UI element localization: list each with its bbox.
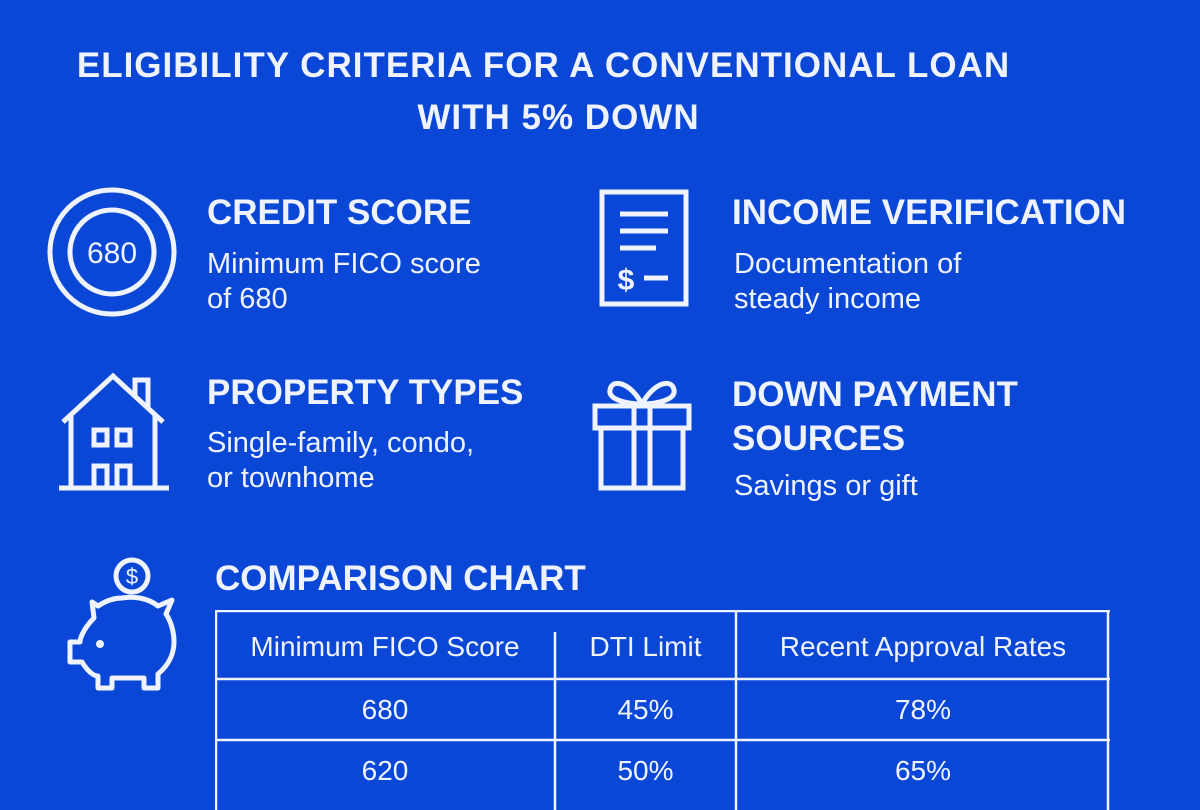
table header: DTI Limit xyxy=(590,631,702,662)
table: comparison chart xyxy=(215,610,1110,810)
text: income verification xyxy=(734,248,962,315)
title: WITH 5% DOWN xyxy=(417,98,700,137)
text: income verification: steady income xyxy=(734,283,921,315)
table row 680 xyxy=(362,694,951,725)
text: credit score xyxy=(207,248,481,315)
icon: credit score gauge: 680 xyxy=(87,237,137,270)
heading: income verification: INCOME VERIFICATION xyxy=(732,193,1126,232)
icon: piggy bank xyxy=(68,558,176,690)
icon: house xyxy=(59,372,169,490)
text: credit score: of 680 xyxy=(207,283,288,315)
table row 620: 65% xyxy=(895,755,951,786)
text: property types: or townhome xyxy=(207,462,375,494)
panel: income verification xyxy=(732,193,1126,315)
heading: property types: PROPERTY TYPES xyxy=(207,373,523,412)
panel: credit score xyxy=(207,193,481,315)
text: property types: Single-family, condo, xyxy=(207,427,474,459)
heading: down payment sources: DOWN PAYMENT xyxy=(732,375,1018,414)
table row 680: 78% xyxy=(895,694,951,725)
heading: down payment sources xyxy=(732,375,1018,458)
table header: Recent Approval Rates xyxy=(780,631,1066,662)
text: down payment sources: Savings or gift xyxy=(734,470,918,502)
text: income verification: Documentation of xyxy=(734,248,961,280)
panel: property types xyxy=(207,373,523,494)
table row 620 xyxy=(362,755,951,786)
icon: document: $ xyxy=(618,264,635,297)
table row 680: 680 xyxy=(362,694,408,725)
title: ELIGIBILITY CRITERIA FOR A CONVENTIONAL LOAN xyxy=(77,46,1010,85)
panel: down payment sources xyxy=(732,375,1018,502)
table header: Minimum FICO Score xyxy=(250,631,520,662)
text: credit score: Minimum FICO score xyxy=(207,248,481,280)
table row 620: 50% xyxy=(617,755,674,786)
heading: down payment sources: SOURCES xyxy=(732,419,905,458)
icon: credit score gauge xyxy=(48,188,176,316)
heading: comparison chart: COMPARISON CHART xyxy=(215,559,586,598)
icon: gift xyxy=(592,380,692,490)
table row 620: 620 xyxy=(362,755,408,786)
text: property types xyxy=(207,427,474,494)
icon: piggy bank: $ xyxy=(126,564,138,589)
table row 680: 45% xyxy=(617,694,674,725)
icon: document xyxy=(600,190,688,306)
title xyxy=(77,46,1010,137)
table header xyxy=(250,631,1066,662)
heading: credit score: CREDIT SCORE xyxy=(207,193,471,232)
